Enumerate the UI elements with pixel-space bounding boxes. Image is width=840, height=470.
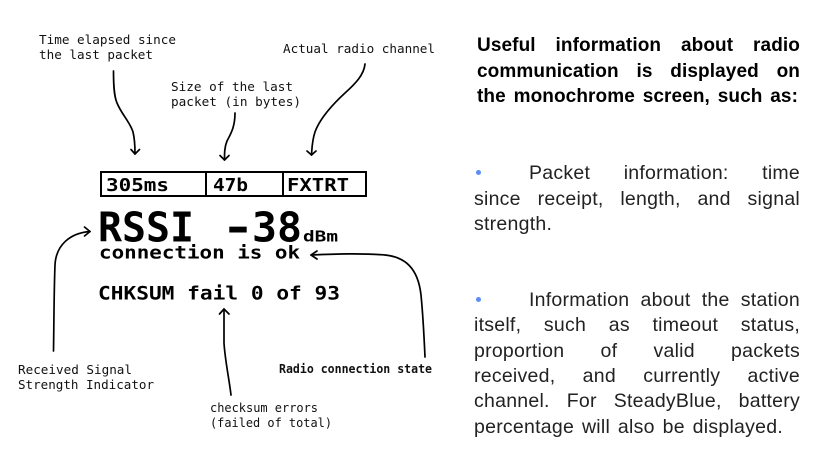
heading: useful information: Useful information about radio xyxy=(477,35,800,56)
checksum text: CHKSUM fail 0 of 93 xyxy=(98,282,340,304)
label: time elapsed xyxy=(39,33,176,62)
label: packet size xyxy=(171,80,301,109)
bullet: station information: proportion of valid packets xyxy=(474,340,800,362)
label: packet size: Size of the last xyxy=(171,80,293,94)
bullet: station information: channel. For SteadyBlue, battery xyxy=(474,390,800,412)
arrow: RSSI xyxy=(54,227,90,351)
heading: useful information xyxy=(477,35,800,107)
label: RSSI xyxy=(18,363,154,392)
arrow: packet size xyxy=(220,113,235,160)
bullet: packet information: since receipt, length, and signal xyxy=(474,188,800,210)
label: radio channel: Actual radio channel xyxy=(283,42,435,56)
label: packet size: packet (in bytes) xyxy=(171,95,301,109)
label: time elapsed: the last packet xyxy=(39,48,153,62)
heading: useful information: the monochrome screen, such as: xyxy=(477,86,798,107)
bullet: packet information: Packet information: time xyxy=(529,162,800,184)
status bar xyxy=(101,172,366,196)
label: connection state: Radio connection state xyxy=(279,362,432,376)
heading: useful information: communication is displayed on xyxy=(477,61,800,82)
connection status text: connection is ok xyxy=(99,242,300,264)
label: time elapsed: Time elapsed since xyxy=(39,33,176,47)
bullet: packet information: strength. xyxy=(474,213,552,235)
RSSI reading: dBm xyxy=(303,228,338,246)
bullet: station information: received, and currently active xyxy=(474,365,800,387)
label: checksum errors: (failed of total) xyxy=(210,416,332,430)
arrow: checksum errors xyxy=(220,309,231,395)
RSSI reading: 38 xyxy=(252,204,302,252)
RSSI reading xyxy=(98,204,338,252)
RSSI reading: RSSI xyxy=(98,204,194,252)
bullet: station information: itself, such as timeout status, xyxy=(474,314,800,336)
status bar: 47b xyxy=(213,175,248,196)
bullet: station information: percentage will also be displayed. xyxy=(474,416,783,438)
bullet: station information xyxy=(474,289,800,438)
RSSI reading: - xyxy=(221,204,255,252)
arrow: connection state xyxy=(311,251,425,357)
bullet: packet information xyxy=(474,162,800,235)
bullet: station information: Information about the station xyxy=(529,289,800,311)
label: checksum errors xyxy=(210,401,332,430)
status bar: FXTRT xyxy=(287,175,349,196)
status bar: 305ms xyxy=(106,175,169,196)
label: RSSI: Received Signal xyxy=(18,363,132,377)
label: RSSI: Strength Indicator xyxy=(18,378,154,392)
label: checksum errors: checksum errors xyxy=(210,401,318,415)
arrow: time elapsed xyxy=(114,71,140,154)
arrow: radio channel xyxy=(307,64,365,155)
panel: annotated monochrome screen diagram xyxy=(18,33,435,430)
